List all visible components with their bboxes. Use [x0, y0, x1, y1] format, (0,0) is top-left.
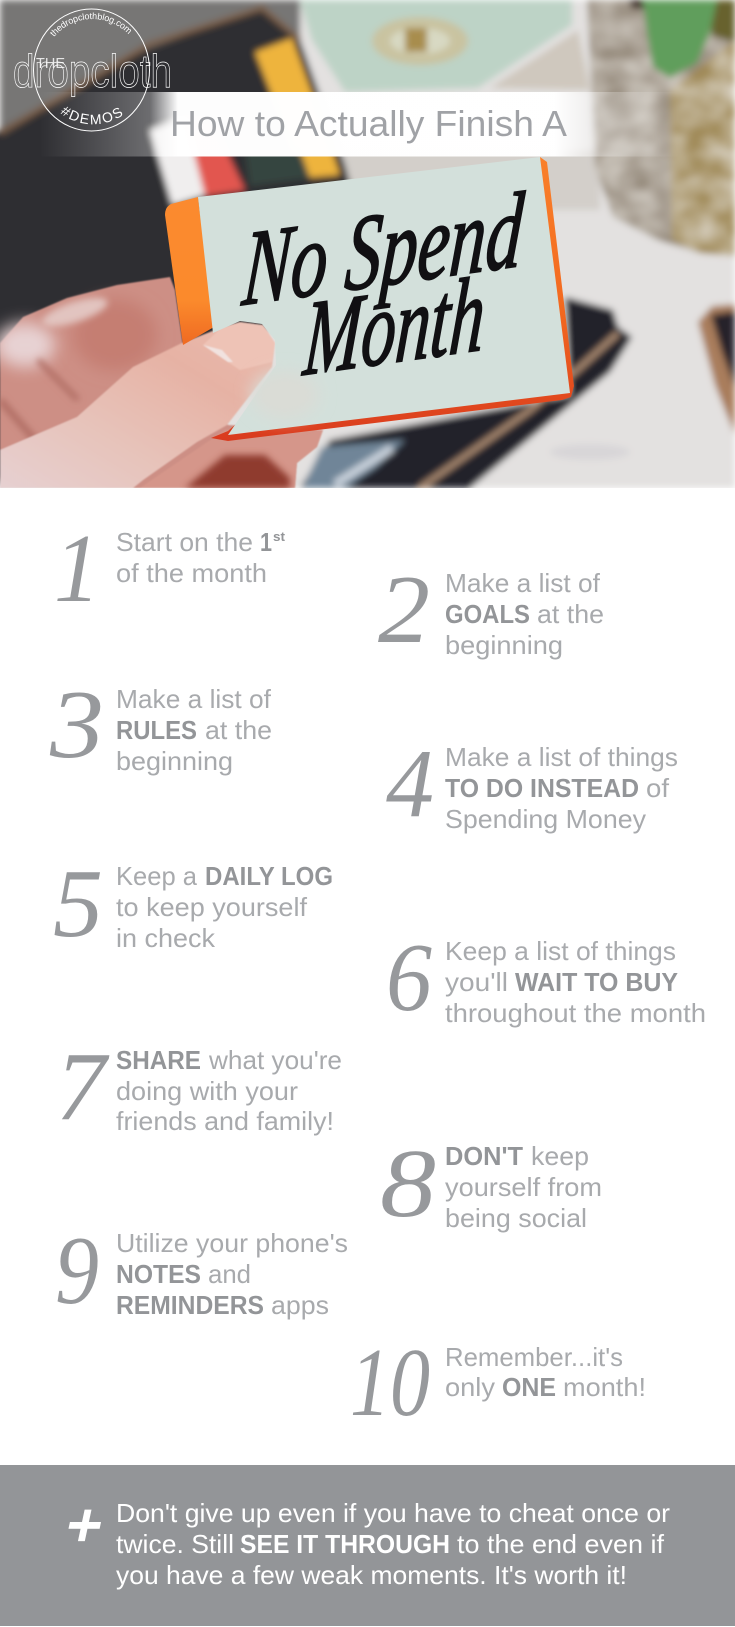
white and red cards [150, 118, 205, 205]
step 2 [378, 556, 604, 663]
step 1 text: Start on the [116, 527, 253, 557]
number 8: 8 [380, 1130, 436, 1237]
step 1 [54, 515, 286, 622]
yellow tab [255, 38, 340, 178]
step 7 text: friends and family! [116, 1106, 334, 1136]
step 6 [386, 924, 706, 1031]
footer text [116, 1498, 670, 1590]
step 8 text: yourself from [445, 1172, 602, 1202]
step 5 [53, 850, 333, 957]
number 5: 5 [53, 850, 103, 957]
footer text: you have a few weak moments. It's worth it! [116, 1560, 627, 1590]
right dark object [698, 304, 735, 435]
logo: dropcloth [13, 45, 172, 97]
number 1: 1 [54, 515, 100, 622]
step 1 text: st [273, 529, 286, 544]
number 6: 6 [386, 924, 432, 1031]
step 1 text: 1 [260, 527, 272, 557]
step 4 text: of [646, 773, 670, 803]
step 10 text: Remember...it's [445, 1342, 623, 1372]
step 9 text: apps [271, 1290, 329, 1320]
step 2 text [445, 568, 604, 660]
step 4 [386, 730, 678, 837]
step 3 text: at the [205, 715, 272, 745]
step 8 text: keep [531, 1141, 589, 1171]
step 7 [56, 1033, 342, 1140]
lower fingers [181, 438, 319, 486]
card red edges [211, 157, 574, 441]
card script: Month: Month [299, 254, 489, 399]
step 8 text: being social [445, 1203, 587, 1233]
step 4 text: TO DO INSTEAD [445, 773, 639, 803]
step 6 text: WAIT TO BUY [515, 967, 678, 997]
photo background [0, 0, 735, 488]
step 7 text: doing with your [116, 1076, 298, 1106]
step 6 text: Keep a list of things [445, 936, 676, 966]
step 7 text [116, 1045, 342, 1136]
title band [0, 92, 735, 156]
number 10: 10 [350, 1329, 430, 1436]
hand [0, 277, 323, 488]
step 9 text: Utilize your phone's [116, 1228, 348, 1258]
number 9: 9 [55, 1217, 99, 1324]
wallet lower [300, 297, 632, 488]
green leaf [643, 0, 717, 78]
marble smudge [556, 446, 624, 458]
step 1 text [116, 527, 286, 588]
step 9 text: NOTES [116, 1259, 201, 1289]
thumb nail [203, 322, 275, 370]
number 2: 2 [378, 556, 430, 663]
step 5 text: to keep yourself [116, 892, 308, 922]
step 9 text [116, 1228, 348, 1320]
plus sign: + [59, 1491, 110, 1560]
step 4 text: Make a list of things [445, 742, 678, 772]
step 4 text [445, 742, 678, 834]
pot [587, 0, 735, 256]
step 3 text: Make a list of [116, 684, 272, 714]
step 6 text: throughout the month [445, 998, 706, 1028]
photo: hand holding card [0, 0, 735, 488]
step 9 text: and [208, 1259, 251, 1289]
footer text: twice. Still [116, 1529, 234, 1559]
step 3 [49, 671, 272, 778]
card script: No Spend: No Spend [239, 170, 527, 329]
step 2 text: at the [537, 599, 604, 629]
step 1 text: of the month [116, 558, 267, 588]
step 8 text: DON'T [445, 1141, 523, 1171]
step 6 text: you'll [445, 967, 508, 997]
step 2 text: GOALS [445, 599, 530, 629]
logo: #DEMOS [60, 106, 122, 124]
step 10 text: only [445, 1372, 495, 1402]
step 4 text: Spending Money [445, 804, 646, 834]
wallet upper [0, 8, 360, 488]
title: How to Actually Finish A [170, 103, 567, 144]
step 6 text [445, 936, 706, 1028]
step 3 text [116, 684, 272, 776]
step 10 text: month! [563, 1372, 646, 1402]
thumb [0, 322, 275, 488]
step 2 text: beginning [445, 630, 563, 660]
step 5 text [116, 861, 333, 953]
mint card top [300, 0, 572, 92]
logo: THE [36, 55, 65, 72]
back fingers [0, 277, 323, 488]
step 9 [55, 1217, 348, 1324]
step 7 text: SHARE [116, 1045, 201, 1075]
step 8 [380, 1130, 602, 1237]
footer text: to the end even if [457, 1529, 665, 1559]
step 3 text: beginning [116, 746, 233, 776]
step 10 text [445, 1342, 646, 1402]
step 5 text: in check [116, 923, 216, 953]
footer text: SEE IT THROUGH [240, 1529, 450, 1559]
step 7 text: what you're [208, 1045, 342, 1075]
step 2 text: Make a list of [445, 568, 601, 598]
step 10 text: ONE [502, 1372, 556, 1402]
number 4: 4 [386, 730, 434, 837]
card orange left strip [165, 197, 214, 345]
number 7: 7 [56, 1033, 110, 1140]
step 5 text: DAILY LOG [205, 861, 333, 891]
step 9 text: REMINDERS [116, 1290, 264, 1320]
footer panel [0, 1465, 735, 1626]
card face [198, 157, 570, 435]
step 3 text: RULES [116, 715, 197, 745]
footer text: Don't give up even if you have to cheat once or [116, 1498, 670, 1528]
step 5 text: Keep a [116, 861, 198, 891]
number 3: 3 [49, 671, 104, 778]
logo: thedropclothblog.com [50, 12, 131, 36]
step 10 [350, 1329, 646, 1436]
step 8 text [445, 1141, 602, 1233]
logo [13, 8, 172, 132]
